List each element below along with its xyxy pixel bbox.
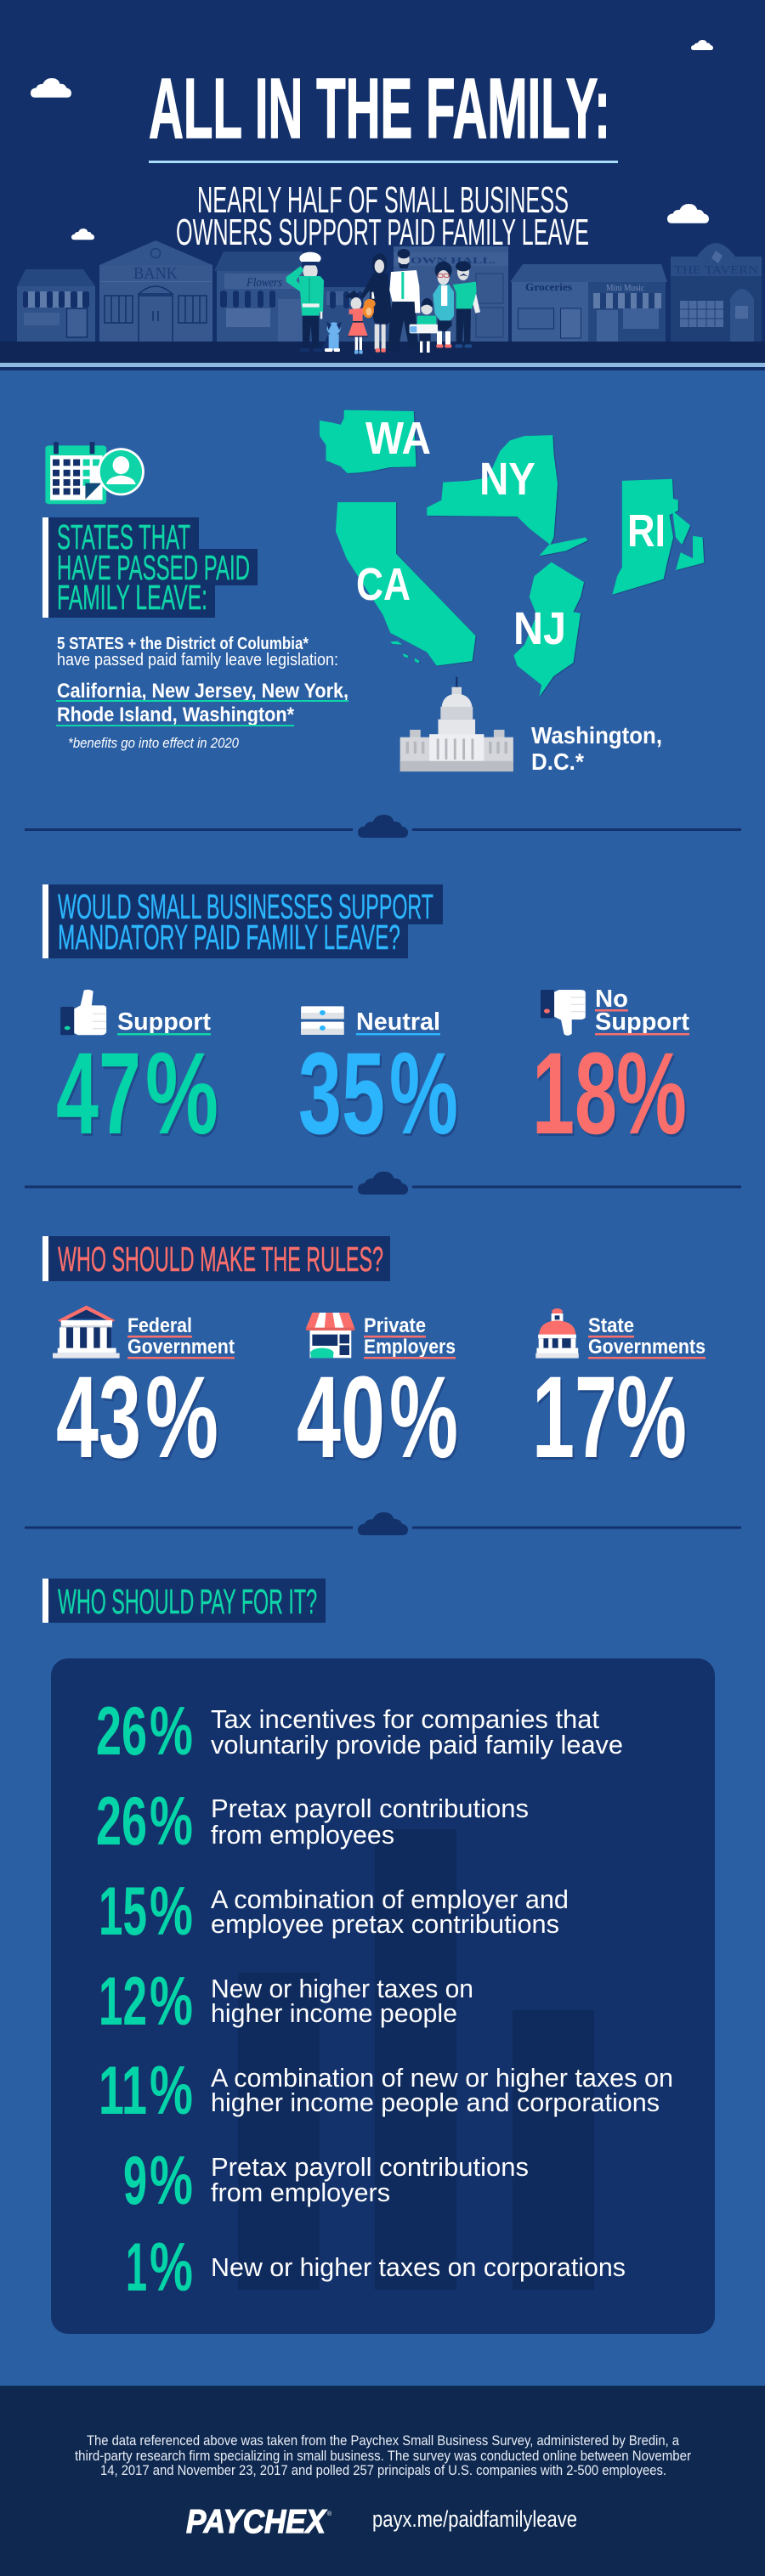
street of buildings: Groceries — [525, 280, 572, 293]
text: Washington, D.C.: D.C.* — [531, 749, 584, 775]
row: 15% combination — [99, 1873, 569, 1950]
icon: neutral bars — [301, 1006, 344, 1035]
text: Washington, D.C. — [531, 722, 662, 775]
row: 15% combination: employee pretax contributions — [211, 1909, 559, 1939]
stat: private employers — [297, 1313, 458, 1483]
stat: no support: No — [595, 986, 628, 1013]
stat: support: 47 — [56, 1029, 141, 1159]
stat: support: % — [145, 1029, 218, 1159]
stat: state governments: % — [616, 1353, 687, 1483]
row: 1% corporations: New or higher taxes on corporations — [211, 2252, 626, 2282]
text: intro: 5 STATES + the District of Columbia* — [57, 635, 309, 653]
row: 26% tax incentives: voluntarily provide paid family leave — [211, 1730, 623, 1760]
icon: storefront — [306, 1313, 354, 1359]
stat: neutral — [298, 1006, 458, 1159]
street of buildings — [17, 240, 762, 342]
panel: would small businesses support — [42, 884, 689, 1159]
title rule — [149, 161, 618, 163]
row: 15% combination: A combination of employer and — [211, 1884, 569, 1914]
heading: states: FAMILY LEAVE: — [57, 578, 207, 617]
stat: no support: % — [616, 1029, 687, 1159]
icon: calendar with person — [45, 442, 144, 504]
panel: header — [0, 0, 765, 370]
icon: thumbs down — [541, 990, 586, 1036]
row: 26% employees: Pretax payroll contributions — [211, 1794, 529, 1823]
family group illustration — [286, 249, 480, 354]
street of buildings: THE TAVERN — [674, 264, 758, 277]
heading: states: STATES THAT — [57, 517, 190, 556]
stat: private employers: Employers — [364, 1336, 456, 1359]
row: 1% corporations — [126, 2229, 626, 2306]
row: 15% combination: 15 — [99, 1873, 147, 1950]
text: source note: third-party research firm specializing in small business. The survey was conducted online between November — [75, 2449, 691, 2464]
stat: federal government: Government — [128, 1336, 235, 1359]
stat: state governments: State — [588, 1314, 634, 1337]
text: intro: have passed paid family leave legislation: — [57, 651, 338, 669]
map: states: CA — [356, 559, 411, 610]
stat: state governments: 17 — [532, 1353, 617, 1483]
row: 26% tax incentives: 26 — [96, 1693, 147, 1770]
icon: state capitol — [536, 1308, 579, 1359]
row: 26% employees: % — [150, 1783, 193, 1860]
row: 12% higher income: New or higher taxes on — [211, 1974, 473, 2003]
icon: divider cloud 3 — [358, 1512, 408, 1535]
street of buildings: OWN HALL. — [411, 257, 496, 266]
stat: state governments: Governments — [588, 1336, 706, 1359]
stat: support: Support — [117, 1008, 211, 1036]
row: 1% corporations: 1 — [126, 2229, 147, 2306]
panel: states that have passed paid family leave — [42, 410, 704, 775]
text: source note: The data referenced above was taken from the Paychex Small Business Survey, administered by Bredin, a — [87, 2433, 680, 2449]
text: state list: California, New Jersey, New York, — [57, 680, 348, 703]
row: 26% employees: from employees — [211, 1820, 394, 1850]
row: 12% higher income: % — [150, 1963, 193, 2040]
row: 26% employees — [96, 1783, 529, 1860]
map: states: NJ — [513, 603, 566, 654]
row: 9% employers: 9 — [123, 2143, 147, 2219]
row: 26% tax incentives: Tax incentives for companies that — [211, 1704, 599, 1734]
row: 12% higher income: higher income people — [211, 1998, 457, 2028]
row: 26% employees: 26 — [96, 1783, 147, 1860]
link text: payx.me/paidfamilyleave — [372, 2506, 577, 2532]
heading: support question: WOULD SMALL BUSINESSES SUPPORT — [58, 887, 434, 926]
map: states: RI — [627, 506, 666, 556]
row: 11% combination taxes: higher income people and corporations — [211, 2087, 660, 2117]
text: Washington, D.C.: Washington, — [531, 722, 662, 749]
row: 15% combination: % — [150, 1873, 193, 1950]
street of buildings: Mini Music — [606, 284, 645, 293]
stat: federal government: % — [145, 1353, 218, 1483]
row: 11% combination taxes — [99, 2053, 673, 2129]
map: states: WA — [366, 413, 431, 464]
row: 11% combination taxes: A combination of new or higher taxes on — [211, 2063, 673, 2093]
icon: capitol building — [400, 677, 513, 771]
row: 9% employers: from employers — [211, 2178, 390, 2207]
heading: support question — [42, 884, 443, 958]
heading: states: HAVE PASSED PAID — [57, 548, 250, 587]
heading: pay — [42, 1579, 326, 1623]
stat: no support — [532, 986, 689, 1159]
subtitle — [176, 179, 589, 253]
map: states: NY — [479, 454, 536, 505]
heading: states — [42, 517, 258, 618]
background bar chart — [238, 1829, 594, 2290]
panel: who should pay for it — [42, 1579, 715, 2334]
panel: who should make the rules — [42, 1236, 706, 1483]
stat: state governments — [532, 1308, 706, 1483]
road — [0, 342, 765, 363]
stat: support — [56, 990, 218, 1159]
icon: clouds — [31, 40, 713, 240]
text: source note: 14, 2017 and November 23, 2017 and polled 257 principals of U.S. companies with 2-500 employees. — [100, 2463, 666, 2478]
stat: neutral: 35 — [298, 1029, 385, 1159]
row: 9% employers: Pretax payroll contributions — [211, 2152, 529, 2182]
text: source note — [75, 2433, 691, 2478]
stat: federal government — [53, 1306, 235, 1483]
row: 1% corporations: % — [150, 2229, 193, 2306]
row: 11% combination taxes: % — [150, 2053, 193, 2129]
text: intro — [57, 635, 338, 669]
text: footnote: *benefits go into effect in 2020 — [68, 735, 239, 751]
logo: Paychex: ® — [327, 2511, 332, 2517]
icon: divider cloud 2 — [358, 1172, 408, 1195]
stat: private employers: % — [389, 1353, 458, 1483]
map: states — [320, 410, 704, 697]
stat: neutral: Neutral — [356, 1008, 440, 1036]
row: 12% higher income — [99, 1963, 473, 2040]
stat: private employers: 40 — [297, 1353, 385, 1483]
text: state list: Rhode Island, Washington* — [57, 703, 295, 726]
icon: thumbs up — [60, 990, 106, 1035]
stat: no support: Support — [595, 1008, 689, 1036]
stat: no support: 18 — [532, 1029, 617, 1159]
panel: footer — [0, 2386, 765, 2576]
stat: private employers: Private — [364, 1314, 426, 1337]
street of buildings: Flowers — [246, 276, 282, 290]
heading: rules: WHO SHOULD MAKE THE RULES? — [58, 1240, 383, 1279]
heading: rules — [42, 1236, 390, 1281]
stat: federal government: Federal — [128, 1314, 192, 1337]
row: 9% employers: % — [150, 2143, 193, 2219]
stat: neutral: % — [389, 1029, 458, 1159]
row: 26% tax incentives — [96, 1693, 623, 1770]
heading: pay: WHO SHOULD PAY FOR IT? — [58, 1582, 317, 1621]
icon: divider cloud — [358, 815, 408, 838]
street of buildings: BANK — [133, 264, 178, 283]
text: state list — [56, 680, 348, 726]
stat: federal government: 43 — [56, 1353, 141, 1483]
row: 9% employers — [123, 2143, 529, 2219]
heading: support question: MANDATORY PAID FAMILY LEAVE? — [58, 918, 400, 957]
results card — [51, 1658, 715, 2334]
row: 26% tax incentives: % — [150, 1693, 193, 1770]
icon: federal building — [53, 1306, 120, 1359]
logo: Paychex: PAYCHEX — [186, 2504, 327, 2540]
row: 12% higher income: 12 — [99, 1963, 147, 2040]
row: 11% combination taxes: 11 — [99, 2053, 147, 2129]
